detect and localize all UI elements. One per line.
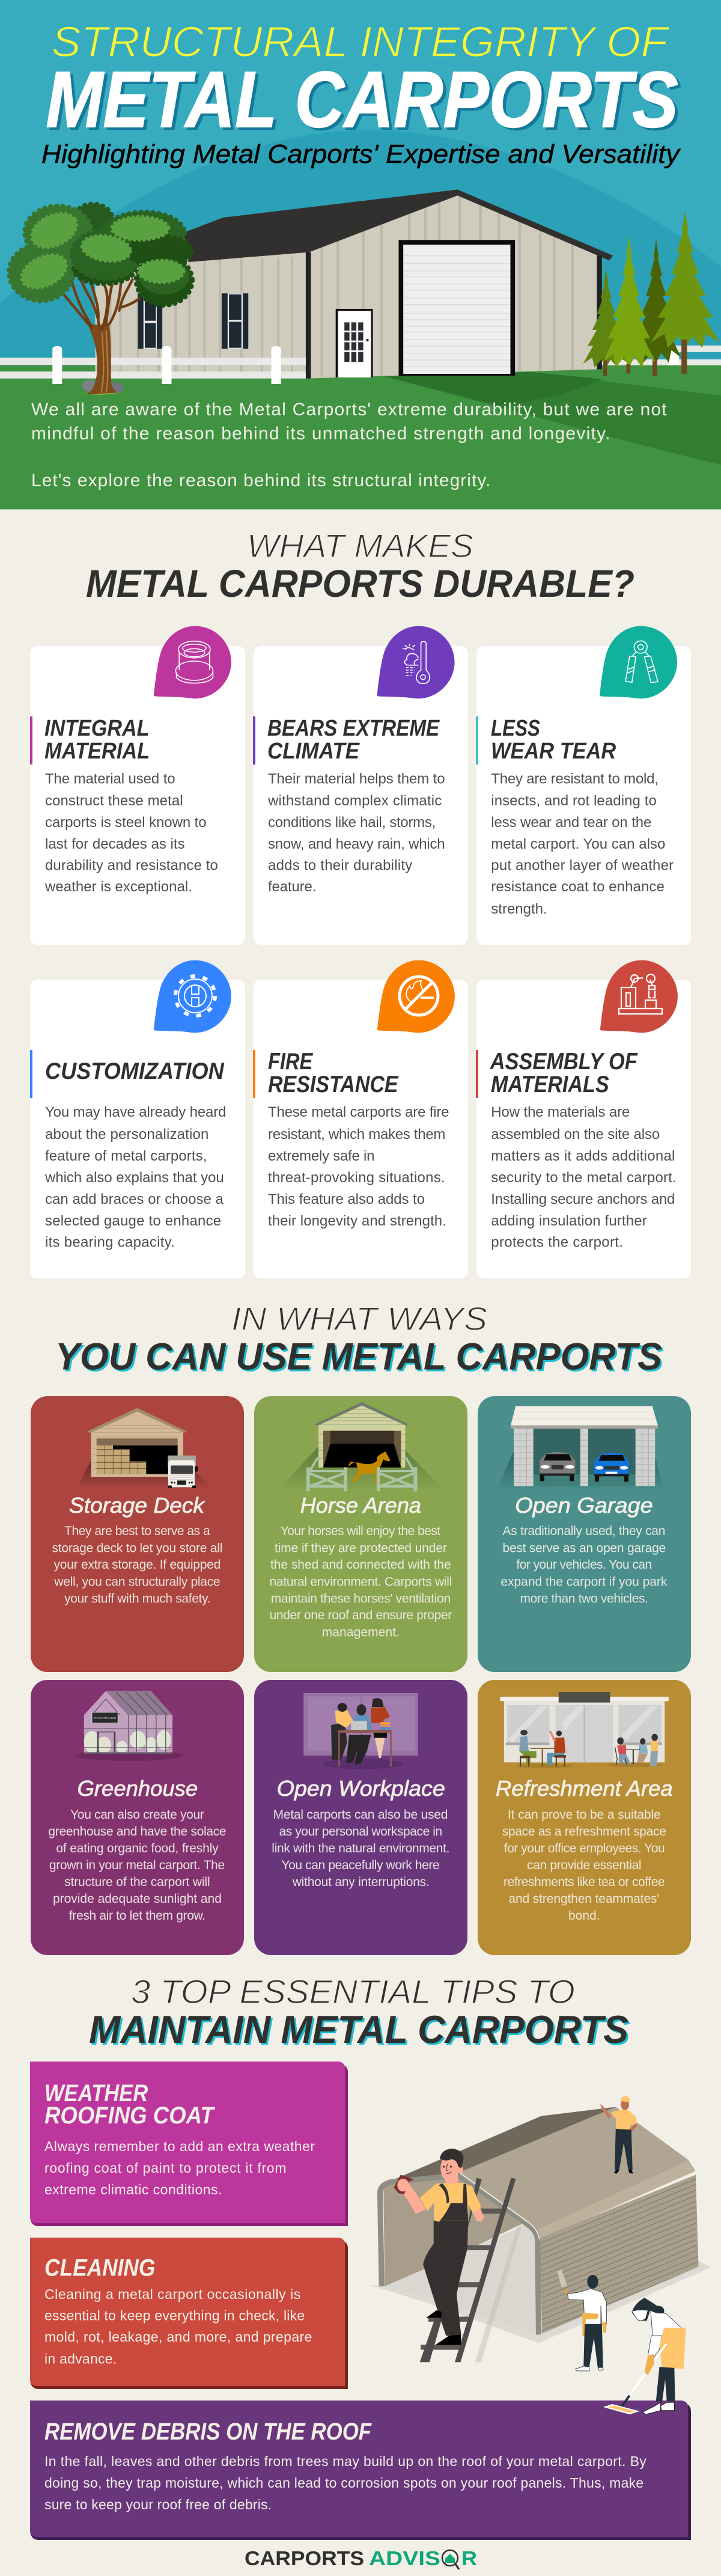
subtitle: Highlighting Metal Carports' Expertise and Versatility	[41, 139, 681, 169]
panel: cleaning	[30, 2238, 348, 2389]
card body: snow, and heavy rain, which	[268, 836, 445, 852]
card body: construct these metal	[45, 793, 183, 809]
intro text	[31, 400, 667, 490]
card body: insects, and rot leading to	[491, 793, 657, 809]
blue car	[594, 1453, 629, 1482]
card body: best serve as an open garage	[502, 1541, 666, 1555]
tip text: In the fall, leaves and other debris from trees may build up on the roof of your metal carport. By	[44, 2453, 646, 2469]
illustration: horse stable	[276, 1402, 446, 1492]
card body: Metal carports can also be used	[273, 1808, 448, 1822]
heading: 3 top essential tips: MAINTAIN METAL CARPORTS	[89, 2007, 628, 2051]
card body: which also explains that you	[44, 1170, 224, 1186]
card body: This feature also adds to	[268, 1191, 425, 1207]
large tree	[10, 204, 192, 395]
heading: in what ways you can use metal carports: YOU CAN USE METAL CARPORTS	[57, 1338, 664, 1380]
card body: You can also create your	[70, 1808, 204, 1822]
icon: robot arm	[600, 960, 678, 1033]
panel: open garage	[478, 1396, 691, 1672]
card heading: MATERIALS	[491, 1072, 609, 1097]
tip text: roofing coat of paint to protect it from	[44, 2160, 287, 2176]
tip text: doing so, they trap moisture, which can lead to corrosion spots on your roof panels. Thus, make	[44, 2475, 643, 2491]
card body: natural environment. Carports will	[269, 1575, 452, 1589]
card body: adds to their durability	[268, 857, 412, 874]
card body: management.	[322, 1625, 400, 1640]
card body: greenhouse and have the solace	[48, 1825, 227, 1839]
people at left table	[519, 1730, 565, 1767]
card body: How the materials are	[491, 1104, 630, 1120]
panel: hero	[0, 0, 721, 509]
tip heading: REMOVE DEBRIS ON THE ROOF	[44, 2419, 372, 2445]
card body: bond.	[568, 1909, 600, 1923]
windows	[138, 293, 248, 349]
footer logo: carports advisor: CARPORTS	[245, 2547, 364, 2569]
right fence	[598, 346, 721, 371]
panel: assembly of materials	[476, 960, 691, 1278]
small door	[336, 309, 373, 377]
hero illustration scene	[0, 130, 721, 509]
card body: They are best to serve as a	[64, 1524, 210, 1538]
card heading: MATERIAL	[44, 739, 150, 764]
card body: fresh air to let them grow.	[69, 1909, 205, 1923]
card body: without any interruptions.	[292, 1875, 430, 1889]
card body: refreshments like tea or coffee	[503, 1875, 665, 1889]
illustration: greenhouse: Greenhouse	[94, 1717, 117, 1720]
card heading: FIRE	[268, 1049, 313, 1075]
panel: remove debris on the roof	[30, 2401, 691, 2540]
card body: durability and resistance to	[45, 857, 218, 874]
card body	[491, 1104, 677, 1250]
card body: put another layer of weather	[491, 857, 674, 874]
tip text: essential to keep everything in check, like	[44, 2308, 305, 2324]
card body	[44, 1104, 226, 1250]
heading: in what ways you can use metal carports: YOU CAN USE METAL CARPORTS	[55, 1335, 662, 1378]
illustration: team around laptop	[303, 1693, 418, 1769]
ladder	[420, 2178, 523, 2362]
card body: carports is steel known to	[45, 814, 207, 831]
left fence	[0, 346, 306, 384]
card body: You may have already heard	[45, 1104, 226, 1120]
card body: can add braces or choose a	[45, 1191, 224, 1207]
card body: your extra storage. If equipped	[54, 1558, 221, 1572]
footer logo: carports advisor: R	[461, 2547, 477, 2569]
card heading: WEAR TEAR	[491, 739, 616, 764]
card body: space as a refreshment space	[502, 1825, 666, 1839]
card heading	[268, 1049, 398, 1097]
ground	[0, 365, 721, 509]
card body: Installing secure anchors and	[491, 1191, 675, 1207]
accent bar	[30, 1050, 32, 1098]
card body: matters as it adds additional	[491, 1148, 675, 1164]
tip text: mold, rot, leakage, and more, and prepare	[44, 2329, 312, 2345]
panel: weather roofing coat	[30, 2062, 348, 2226]
heading: 3 top essential tips: 3 TOP ESSENTIAL TIPS TO	[131, 1973, 575, 2010]
card body: weather is exceptional.	[44, 879, 192, 895]
panel: bears extreme climate	[253, 626, 468, 945]
card heading	[491, 716, 616, 764]
card body: As traditionally used, they can	[502, 1524, 665, 1538]
grey car	[540, 1452, 576, 1481]
card heading	[267, 716, 440, 764]
card body	[44, 771, 218, 895]
card body: You can peacefully work here	[281, 1858, 440, 1872]
card body: well, you can structurally place	[53, 1575, 221, 1589]
tip heading: CLEANING	[44, 2255, 155, 2281]
card body: about the personalization	[45, 1126, 208, 1143]
icon: material cylinder	[154, 626, 231, 698]
card body: extremely safe in	[268, 1148, 375, 1164]
card body: threat-provoking situations.	[268, 1170, 445, 1186]
metal carport building	[95, 189, 613, 379]
card heading: BEARS EXTREME	[267, 716, 440, 741]
card heading: CUSTOMIZATION	[45, 1058, 224, 1084]
card body: withstand complex climatic	[267, 793, 442, 809]
card body: assembled on the site also	[491, 1126, 660, 1143]
panel: customization	[30, 960, 245, 1278]
tip text: sure to keep your roof free of debris.	[44, 2497, 272, 2512]
card heading	[44, 716, 150, 764]
card body	[268, 1104, 449, 1229]
tip text	[44, 2286, 312, 2367]
card body: expand the carport if you park	[500, 1575, 668, 1589]
card body: These metal carports are fire	[268, 1104, 449, 1120]
heading: in what ways you can use metal carports	[55, 1300, 664, 1380]
card body: feature of metal carports,	[45, 1148, 207, 1164]
card body: selected gauge to enhance	[45, 1213, 221, 1229]
icon: magnifier with house	[442, 2550, 459, 2569]
heading: 3 top essential tips: MAINTAIN METAL CARPORTS	[91, 2009, 630, 2053]
tip text	[44, 2453, 646, 2512]
panel: open workplace	[254, 1680, 467, 1955]
card heading: INTEGRAL	[44, 716, 149, 741]
accent bar	[476, 716, 478, 765]
card body: resistant, which makes them	[268, 1126, 445, 1143]
woman mopping	[603, 2298, 686, 2414]
card body: time if they are protected under	[275, 1541, 447, 1555]
illustration: carport maintenance	[368, 2096, 711, 2414]
card body: your stuff with much safety.	[64, 1592, 210, 1606]
heading: what makes metal carports durable: WHAT MAKES	[247, 527, 473, 564]
card body: of eating organic food, freshly	[56, 1842, 219, 1855]
card body: grown in your metal carport. The	[49, 1858, 225, 1872]
card body: The material used to	[45, 771, 175, 787]
card body: Your horses will enjoy the best	[281, 1524, 440, 1538]
card heading: LESS	[491, 716, 540, 741]
card body	[267, 771, 445, 895]
card body: link with the natural environment.	[272, 1842, 449, 1855]
tip heading: ROOFING COAT	[44, 2102, 216, 2129]
icon: weather thermometer	[377, 626, 455, 698]
card body	[272, 1808, 449, 1889]
worker on roof	[600, 2096, 637, 2173]
card body: more than two vehicles.	[520, 1592, 648, 1606]
illustration: cafe front with people	[500, 1692, 669, 1768]
panel: integral material	[30, 626, 245, 945]
intro text: mindful of the reason behind its unmatched strength and longevity.	[31, 424, 610, 444]
card body: their longevity and strength.	[268, 1213, 446, 1229]
panel: fire resistance	[253, 960, 468, 1278]
card body: and strengthen teammates'	[508, 1892, 659, 1906]
card body: It can prove to be a suitable	[508, 1808, 661, 1822]
tip text: Always remember to add an extra weather	[44, 2138, 315, 2154]
card title: Refreshment Area	[496, 1776, 673, 1801]
accent bar	[30, 716, 32, 765]
accent bar	[253, 1050, 255, 1098]
card heading: ASSEMBLY OF	[490, 1049, 638, 1075]
card body: provide adequate sunlight and	[53, 1892, 222, 1906]
footer logo: carports advisor	[245, 2547, 477, 2569]
card body: for your vehicles. You can	[516, 1558, 652, 1572]
card title: Open Workplace	[277, 1776, 445, 1801]
card heading	[490, 1049, 638, 1097]
heading: what makes metal carports durable	[86, 527, 634, 605]
card body: for your office employees. You	[504, 1842, 665, 1855]
pine trees	[583, 211, 720, 376]
card body: They are resistant to mold,	[491, 771, 659, 787]
card body	[502, 1808, 666, 1923]
card body: less wear and tear on the	[491, 814, 651, 831]
worker with brush	[557, 2269, 606, 2371]
card body: resistance coat to enhance	[491, 879, 665, 895]
card heading: RESISTANCE	[268, 1072, 398, 1097]
panel: greenhouse	[31, 1680, 244, 1955]
card body: maintain these horses' ventilation	[271, 1592, 451, 1606]
card body: its bearing capacity.	[45, 1235, 175, 1250]
intro text: We all are aware of the Metal Carports' extreme durability, but we are not	[31, 400, 667, 420]
roll-up garage door	[399, 240, 515, 376]
tip text	[44, 2138, 315, 2197]
card body	[491, 771, 674, 917]
card body: under one roof and ensure proper	[269, 1608, 452, 1622]
card body: last for decades as its	[45, 836, 185, 852]
card body: conditions like hail, storms,	[268, 814, 436, 831]
card body: as your personal workspace in	[279, 1825, 442, 1839]
intro text: Let's explore the reason behind its structural integrity.	[31, 471, 490, 490]
panel: refreshment area	[478, 1680, 691, 1955]
card heading: CLIMATE	[267, 739, 360, 764]
card title: Storage Deck	[69, 1493, 205, 1518]
card title: Greenhouse	[78, 1776, 198, 1801]
tip text: Cleaning a metal carport occasionally is	[44, 2286, 300, 2302]
card body: storage deck to let you store all	[52, 1541, 222, 1555]
icon: hand gripper	[600, 626, 677, 698]
icon: no fire	[377, 960, 455, 1033]
accent bar	[476, 1050, 478, 1098]
illustration: greenhouse	[76, 1691, 182, 1761]
tip text: in advance.	[44, 2351, 117, 2367]
card body: metal carport. You can also	[491, 836, 665, 852]
card body: adding insulation further	[491, 1213, 647, 1229]
card body	[500, 1524, 668, 1606]
card body: feature.	[268, 879, 316, 895]
card body	[48, 1808, 227, 1923]
tip heading: WEATHER	[44, 2080, 148, 2107]
card body: protects the carport.	[491, 1235, 623, 1250]
footer logo: carports advisor: ADVIS	[369, 2547, 440, 2569]
card body: Their material helps them to	[268, 771, 445, 787]
icon: gear wrench	[154, 960, 231, 1033]
heading: in what ways you can use metal carports: IN WHAT WAYS	[231, 1300, 487, 1337]
card body: structure of the carport will	[64, 1875, 210, 1889]
man on ladder	[394, 2149, 484, 2345]
card body	[52, 1524, 222, 1606]
tip heading	[44, 2080, 216, 2129]
panel: storage deck	[31, 1396, 244, 1672]
people at right table	[615, 1734, 658, 1766]
illustration: storage shed with truck	[77, 1408, 213, 1489]
panel: less wear tear	[476, 626, 691, 945]
card body: the shed and connected with the	[270, 1558, 451, 1572]
accent bar	[253, 716, 255, 765]
card body: can provide essential	[527, 1858, 642, 1872]
illustration: open garage with cars	[496, 1406, 664, 1492]
card title: Horse Arena	[300, 1493, 421, 1518]
title: structural integrity of: STRUCTURAL INTEGRITY OF	[52, 19, 670, 66]
heading: what makes metal carports durable: METAL CARPORTS DURABLE?	[86, 562, 634, 605]
card body: security to the metal carport.	[491, 1170, 677, 1186]
tip text: extreme climatic conditions.	[44, 2182, 222, 2197]
panel: horse arena	[254, 1396, 467, 1672]
card title: Open Garage	[515, 1493, 653, 1518]
card body	[269, 1524, 452, 1640]
heading: 3 top essential tips	[89, 1973, 630, 2053]
card body: strength.	[491, 901, 547, 917]
